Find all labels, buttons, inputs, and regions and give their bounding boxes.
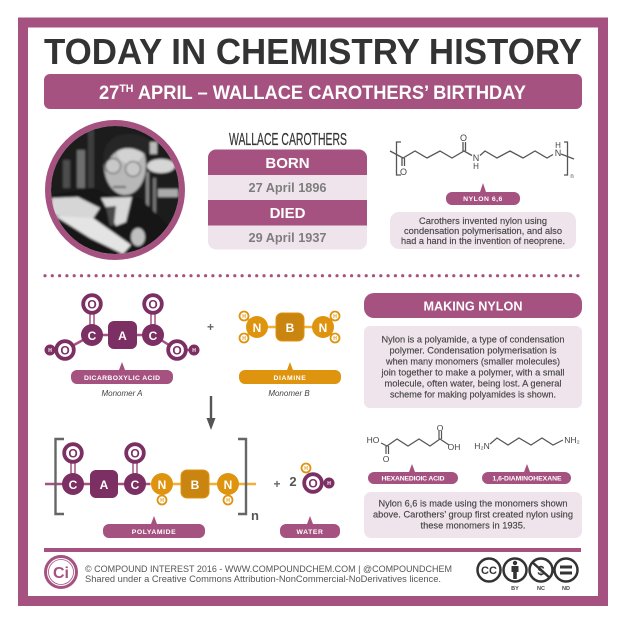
monomer B diagram: H bbox=[333, 314, 337, 320]
subtitle banner: 27 bbox=[99, 83, 120, 104]
monomer B diagram: H bbox=[333, 336, 337, 342]
nylon 6,6 structure: O bbox=[400, 167, 407, 177]
plus sign: + bbox=[207, 320, 214, 334]
text block: nylon 6,6 monomers bbox=[364, 492, 582, 538]
label: nylon 6,6: NYLON 6,6 bbox=[463, 196, 503, 203]
text block: polyamide explanation: scheme for making polyamides is shown. bbox=[390, 390, 556, 400]
born and died table: 27 April 1896 bbox=[248, 181, 327, 195]
footer credits bbox=[85, 564, 452, 585]
name heading: WALLACE CAROTHERS bbox=[229, 129, 347, 149]
polyamide diagram: A bbox=[100, 478, 109, 492]
hexanedioic acid structure: OH bbox=[448, 442, 460, 452]
nylon 6,6 structure: N bbox=[555, 148, 561, 158]
born and died table: DIED bbox=[270, 205, 306, 222]
footer credits: © COMPOUND INTEREST 2016 - WWW.COMPOUNDCHEM.COM | @COMPOUNDCHEM bbox=[85, 564, 452, 575]
creative commons icons bbox=[478, 558, 578, 592]
nylon 6,6 structure bbox=[390, 133, 574, 180]
text block: carothers invented nylon bbox=[390, 212, 576, 249]
polyamide diagram: H bbox=[226, 498, 230, 504]
text block: nylon 6,6 monomers: these monomers in 1935. bbox=[420, 520, 526, 532]
portrait photo bbox=[48, 122, 182, 262]
water molecule: H bbox=[304, 466, 308, 472]
atoms: C bbox=[88, 329, 97, 343]
water molecule: O bbox=[308, 476, 318, 490]
monomer A diagram bbox=[44, 295, 200, 359]
label: hexanedioic acid bbox=[368, 464, 458, 484]
heading: making nylon: MAKING NYLON bbox=[424, 298, 522, 314]
creative commons icons: NC bbox=[537, 586, 545, 592]
label: 1,6-diaminohexane bbox=[482, 464, 571, 484]
text block: polyamide explanation: molecule, often water, being lost. A general bbox=[384, 378, 562, 390]
atoms: C bbox=[149, 329, 158, 343]
label: dicarboxylic acid: DICARBOXYLIC ACID bbox=[84, 375, 160, 382]
atoms bbox=[44, 295, 200, 359]
atoms: H bbox=[192, 348, 196, 354]
creative commons icons: CC bbox=[481, 565, 497, 577]
creative commons icons: BY bbox=[511, 586, 519, 592]
polyamide diagram: C bbox=[131, 478, 140, 492]
monomer B diagram: N bbox=[319, 321, 327, 335]
label: hexanedioic acid: HEXANEDIOIC ACID bbox=[382, 476, 445, 482]
label: diamine bbox=[239, 362, 341, 384]
1,6-diaminohexane structure: H₂N bbox=[474, 441, 490, 451]
nylon 6,6 structure: H bbox=[555, 141, 561, 150]
polyamide diagram: O bbox=[130, 446, 140, 460]
nylon 6,6 structure: N bbox=[473, 153, 479, 163]
polyamide diagram: N bbox=[158, 478, 166, 492]
born and died table bbox=[208, 150, 367, 250]
subtitle banner: TH bbox=[119, 83, 134, 95]
atoms: A bbox=[118, 329, 127, 343]
monomer B diagram bbox=[240, 312, 340, 342]
caption: monomer A: Monomer A bbox=[101, 389, 143, 398]
monomer B diagram: N bbox=[253, 321, 261, 335]
label: 1,6-diaminohexane: 1,6-DIAMINOHEXANE bbox=[492, 476, 562, 482]
label: water bbox=[280, 516, 340, 538]
dotted divider bbox=[45, 274, 581, 277]
polyamide diagram: N bbox=[224, 478, 232, 492]
label: polyamide bbox=[103, 516, 205, 538]
nylon 6,6 structure: n bbox=[570, 174, 574, 180]
hexanedioic acid structure: O bbox=[437, 423, 444, 433]
label: water: WATER bbox=[296, 529, 324, 536]
water molecule: H bbox=[327, 481, 331, 487]
compound interest logo: Ci bbox=[53, 565, 69, 582]
atoms: O bbox=[172, 343, 182, 357]
polyamide diagram bbox=[45, 439, 259, 523]
hexanedioic acid structure bbox=[367, 423, 460, 464]
text block: nylon 6,6 monomers: Nylon 6,6 is made using the monomers shown bbox=[378, 498, 568, 510]
1,6-diaminohexane structure bbox=[474, 435, 580, 451]
hexanedioic acid structure: O bbox=[383, 454, 390, 464]
text block: carothers invented nylon: Carothers invented nylon using bbox=[419, 216, 547, 227]
polyamide diagram: C bbox=[69, 478, 78, 492]
water molecule bbox=[273, 464, 334, 492]
subtitle banner: APRIL – WALLACE CAROTHERS’ BIRTHDAY bbox=[133, 83, 526, 104]
polyamide diagram: O bbox=[68, 446, 78, 460]
polyamide diagram: H bbox=[160, 498, 164, 504]
atoms: O bbox=[60, 343, 70, 357]
label: nylon 6,6 bbox=[446, 183, 520, 205]
title: TODAY IN CHEMISTRY HISTORY bbox=[44, 31, 582, 72]
heading: making nylon bbox=[364, 293, 582, 318]
text block: polyamide explanation: join together to make a polymer, with a small bbox=[381, 368, 564, 378]
born and died table: 29 April 1937 bbox=[248, 231, 327, 245]
text block: carothers invented nylon: condensation polymerisation, and also bbox=[404, 226, 562, 237]
text block: polyamide explanation: polymer. Condensation polymerisation is bbox=[390, 346, 557, 356]
text block: polyamide explanation bbox=[364, 326, 582, 408]
nylon 6,6 structure: O bbox=[460, 133, 467, 143]
subtitle banner bbox=[44, 74, 582, 109]
creative commons icons: $ bbox=[537, 563, 545, 578]
atoms: O bbox=[148, 297, 158, 311]
monomer B diagram: H bbox=[242, 336, 246, 342]
footer divider bbox=[44, 548, 581, 552]
footer credits: Shared under a Creative Commons Attribution-NonCommercial-NoDerivatives licence. bbox=[85, 574, 441, 585]
polyamide diagram: B bbox=[191, 478, 200, 492]
label: diamine: DIAMINE bbox=[274, 375, 306, 382]
polyamide diagram: n bbox=[251, 508, 259, 523]
reaction arrow bbox=[206, 396, 216, 430]
atoms: H bbox=[48, 348, 52, 354]
creative commons icons: ND bbox=[562, 586, 570, 592]
text block: nylon 6,6 monomers: above. Carothers’ group first created nylon using bbox=[373, 510, 573, 520]
label: dicarboxylic acid bbox=[71, 362, 173, 384]
water molecule: + bbox=[273, 477, 281, 491]
label: polyamide: POLYAMIDE bbox=[132, 529, 176, 536]
born and died table: BORN bbox=[265, 155, 310, 172]
monomer B diagram: H bbox=[242, 314, 246, 320]
caption: monomer B: Monomer B bbox=[268, 389, 310, 398]
text block: polyamide explanation: when many monomers (smaller molecules) bbox=[385, 356, 560, 368]
hexanedioic acid structure: HO bbox=[367, 435, 380, 445]
compound interest logo bbox=[46, 556, 76, 588]
1,6-diaminohexane structure: NH₂ bbox=[564, 435, 580, 445]
text block: polyamide explanation: Nylon is a polyamide, a type of condensation bbox=[382, 334, 564, 346]
water molecule: 2 bbox=[289, 474, 297, 489]
nylon 6,6 structure: H bbox=[473, 162, 479, 171]
monomer B diagram: B bbox=[286, 321, 295, 335]
atoms: O bbox=[87, 297, 97, 311]
text block: carothers invented nylon: had a hand in the invention of neoprene. bbox=[401, 236, 565, 247]
